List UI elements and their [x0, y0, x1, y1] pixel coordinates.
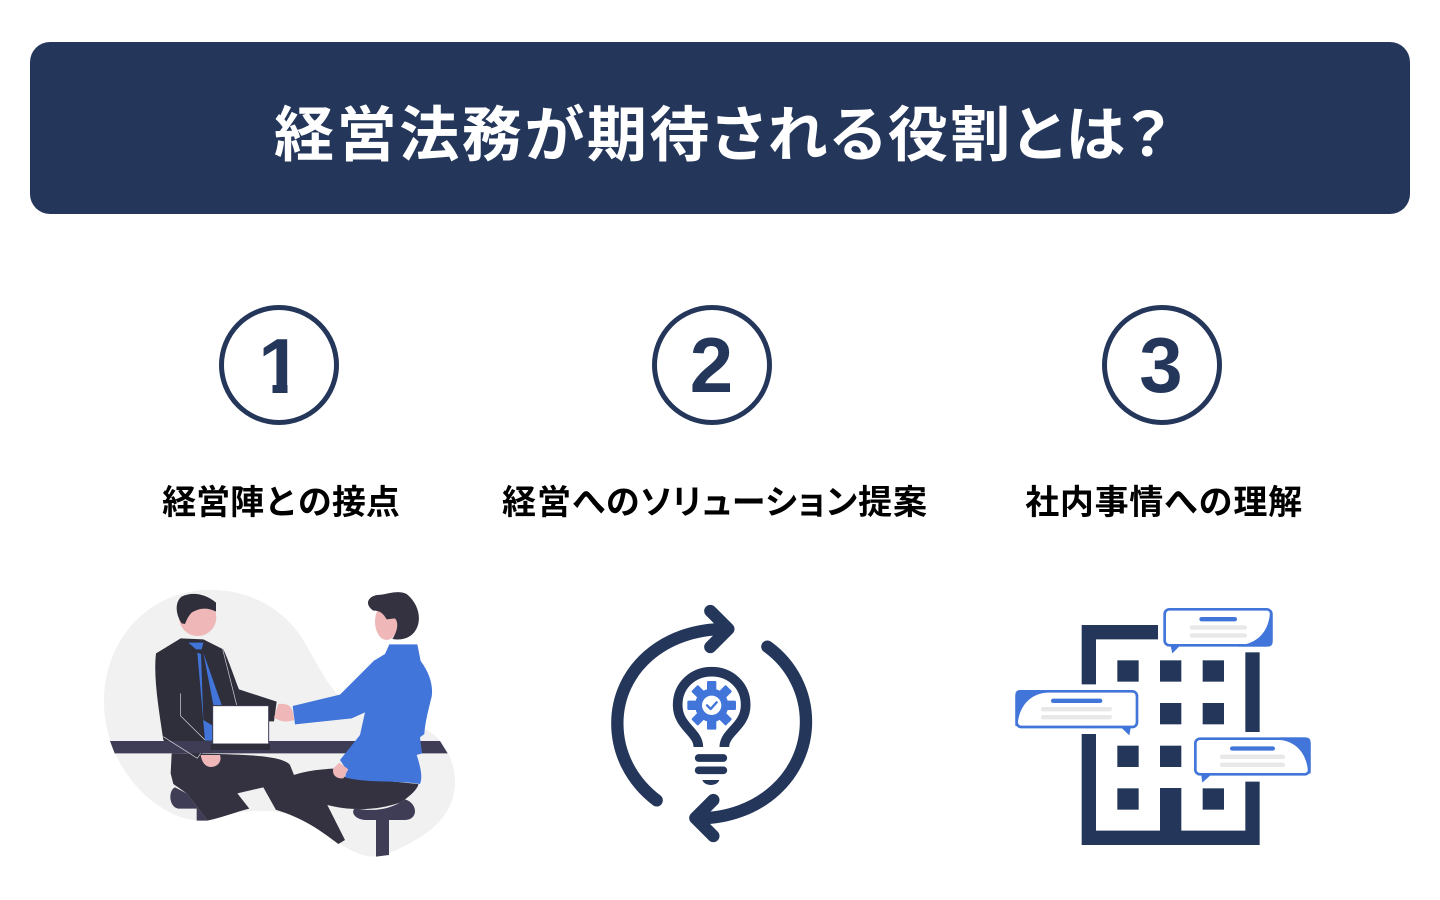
gear: [687, 681, 736, 730]
heading: 社内事情への理解: 社内事情への理解: [1025, 475, 1303, 524]
heading: 経営陣との接点: 経営陣との接点: [162, 475, 400, 524]
speech bubble right: [1195, 737, 1311, 783]
laptop: [213, 706, 269, 744]
right person: [293, 644, 432, 784]
title: 経営法務が期待される役割とは？: [274, 87, 1172, 174]
number badge 2: 2: [690, 321, 733, 409]
heading: 経営へのソリューション提案: 経営へのソリューション提案: [502, 475, 928, 524]
handshake: [274, 704, 294, 721]
cycle arrows: [617, 629, 727, 800]
number badge 3: [1104, 308, 1220, 422]
illustration: handshake meeting: [104, 590, 455, 857]
number badge 1: [222, 308, 336, 422]
building: [1082, 625, 1260, 845]
speech bubble left: [1015, 690, 1137, 735]
number badge 2: [654, 308, 770, 422]
number badge 1: 1: [258, 322, 302, 410]
left person: [155, 638, 277, 758]
bulb outline: [678, 672, 746, 747]
title banner: [30, 42, 1410, 214]
speech bubble top: [1165, 609, 1273, 653]
number badge 3: 3: [1139, 321, 1183, 409]
icon: office building with speech bubbles: [1015, 609, 1311, 845]
stools: [170, 787, 207, 821]
table: [110, 741, 448, 753]
icon: bulb with gear and cycle arrows: [617, 611, 806, 836]
